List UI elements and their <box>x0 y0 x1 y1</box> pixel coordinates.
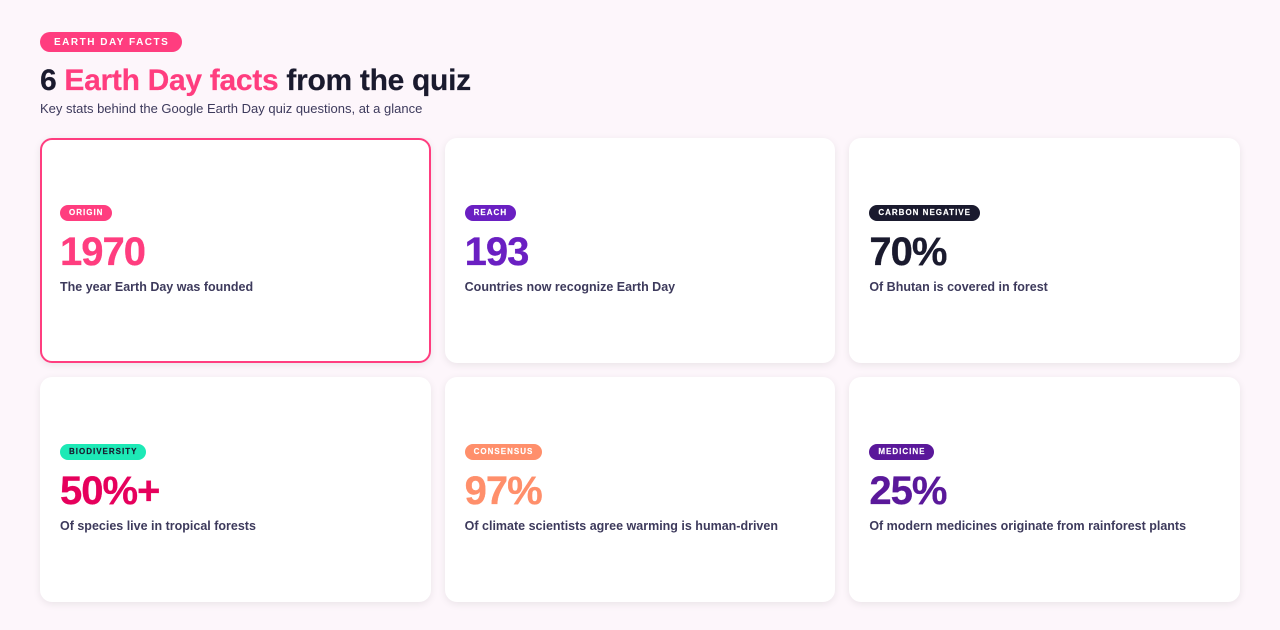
stat: 25%: 25% <box>869 469 946 513</box>
tag: origin: ORIGIN <box>69 208 103 217</box>
panel: reach <box>445 138 835 363</box>
badge: Earth Day facts: EARTH DAY FACTS <box>54 37 169 48</box>
description: carbon negative: Of Bhutan is covered in forest <box>869 280 1048 294</box>
description: reach: Countries now recognize Earth Day <box>465 280 675 294</box>
stat: 193: 193 <box>465 230 528 274</box>
title: 6 Earth Day facts from the quiz <box>40 64 471 97</box>
description: medicine: Of modern medicines originate from rainforest plants <box>869 519 1186 533</box>
tag: consensus <box>465 444 542 460</box>
stat: 70%: 70% <box>869 230 946 274</box>
tag: carbon negative: CARBON NEGATIVE <box>878 208 971 217</box>
stat: 1970: 1970 <box>60 230 145 274</box>
badge: Earth Day facts <box>40 32 182 52</box>
tag: medicine <box>869 444 934 460</box>
panel: consensus <box>445 377 835 602</box>
tag: carbon negative <box>869 205 980 221</box>
tag: reach: REACH <box>474 208 507 217</box>
stat: 50%+: 50%+ <box>60 469 159 513</box>
panel: medicine <box>849 377 1240 602</box>
description: origin: The year Earth Day was founded <box>60 280 253 294</box>
tag: consensus: CONSENSUS <box>474 447 533 456</box>
panel: origin <box>40 138 431 363</box>
description: biodiversity: Of species live in tropical forests <box>60 519 256 533</box>
tag: biodiversity: BIODIVERSITY <box>69 447 137 456</box>
description: consensus: Of climate scientists agree warming is human-driven <box>465 519 778 533</box>
panel: biodiversity <box>40 377 431 602</box>
tag: biodiversity <box>60 444 146 460</box>
stat: 97%: 97% <box>465 469 542 513</box>
tag: origin <box>60 205 112 221</box>
tag: medicine: MEDICINE <box>878 447 925 456</box>
tag: reach <box>465 205 516 221</box>
panel: carbon negative <box>849 138 1240 363</box>
subtitle: Key stats behind the Google Earth Day quiz questions, at a glance <box>40 101 422 116</box>
